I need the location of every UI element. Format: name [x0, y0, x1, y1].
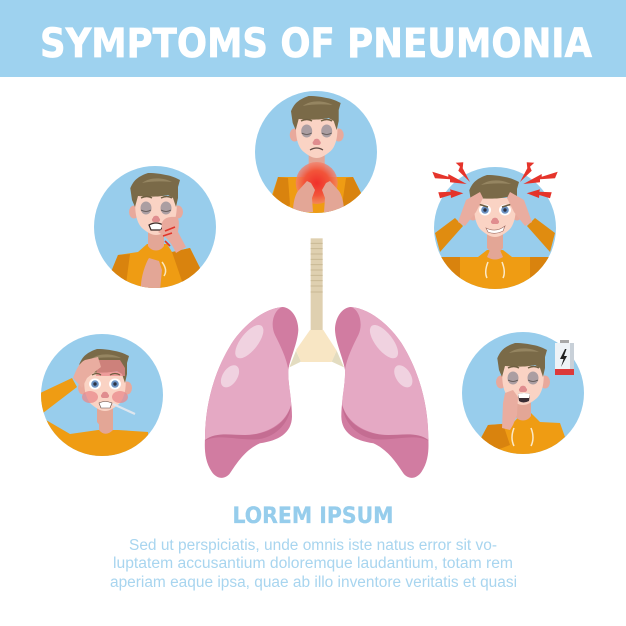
trachea	[311, 238, 323, 332]
left lung	[205, 307, 298, 478]
hand on cheek	[158, 217, 186, 253]
right lung	[335, 307, 429, 478]
pain bolts	[432, 162, 558, 198]
mouth: grimace	[486, 226, 505, 233]
fever flush	[82, 360, 128, 403]
panel: toothache and cough	[94, 166, 216, 295]
panel: fatigue	[462, 332, 584, 458]
mouth: yawn	[518, 393, 530, 402]
panel: sore chest and throat	[255, 91, 377, 220]
header banner	[0, 0, 626, 77]
bronchi	[289, 330, 344, 367]
body text: Sed ut perspiciatis, unde omnis iste natus error sit vo-	[129, 537, 497, 554]
body text	[110, 537, 517, 591]
glow: throat inflammation	[296, 162, 338, 204]
hand on forehead	[73, 357, 101, 388]
body text: aperiam eaque ipsa, quae ab illo inventore veritatis et quasi	[110, 574, 517, 591]
lungs illustration	[205, 238, 429, 478]
body text: luptatem accusantium doloremque laudantium, totam rem	[113, 555, 513, 572]
icon: low battery	[555, 340, 574, 375]
thermometer	[113, 404, 135, 414]
hand over mouth	[502, 390, 518, 430]
panel: fever	[38, 334, 163, 460]
subheading: LOREM IPSUM	[232, 504, 394, 529]
hands on head	[458, 192, 483, 226]
mouth: clenched teeth	[149, 223, 163, 230]
panel: headache	[432, 162, 558, 295]
